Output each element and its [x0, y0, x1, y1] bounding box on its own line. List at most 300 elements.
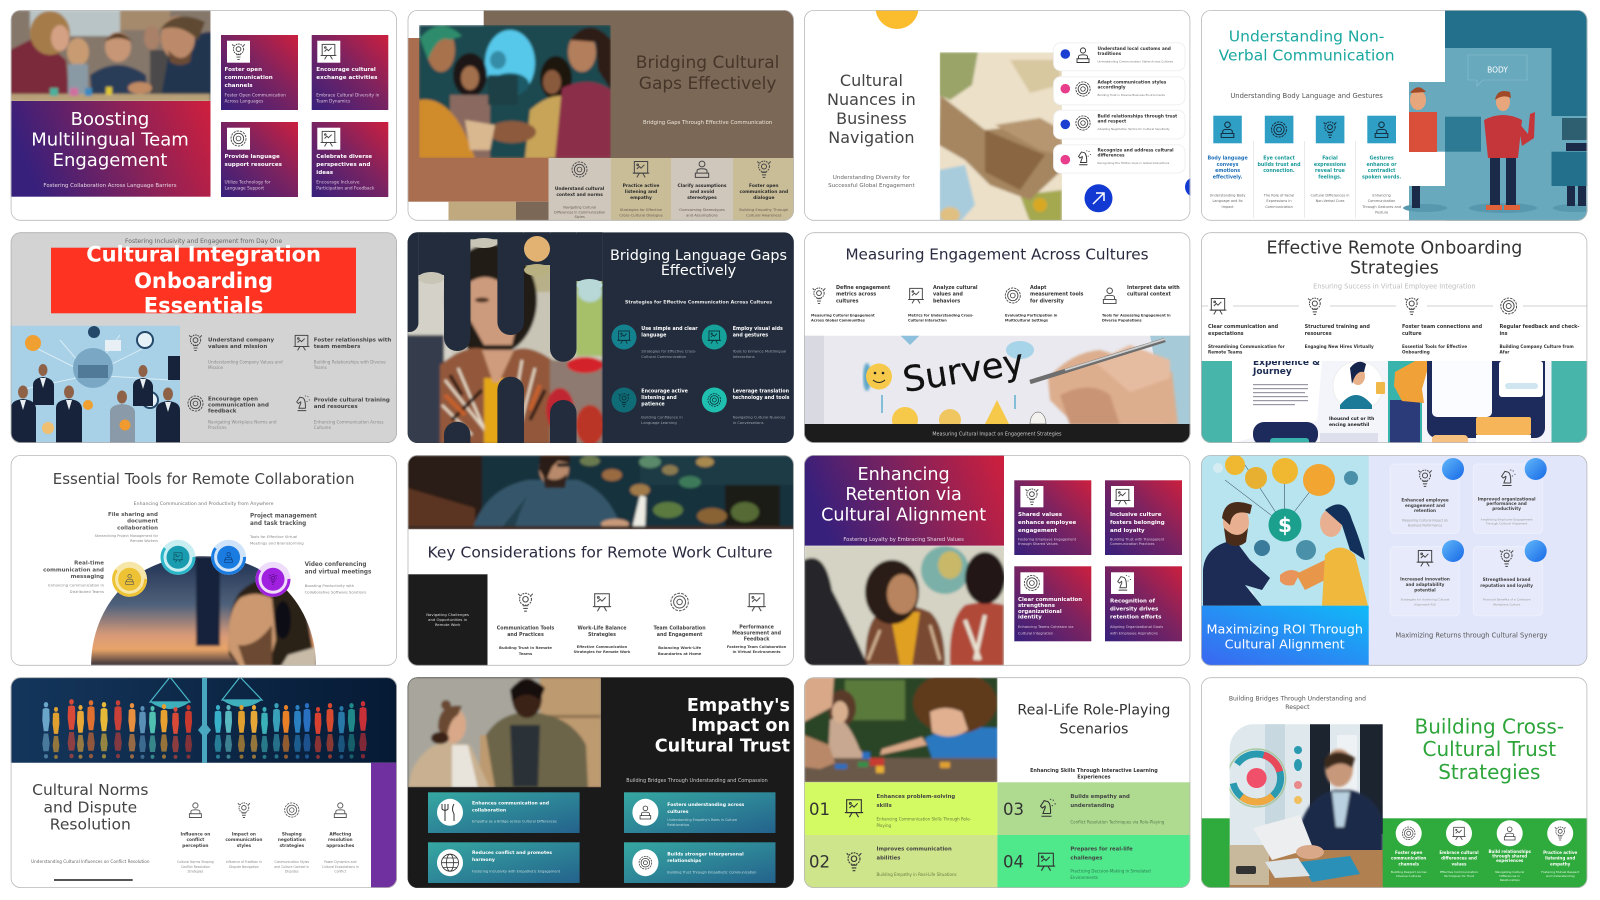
tile: Inclusive culture: and loyalty	[1110, 528, 1145, 534]
column: Body language: Language and Its	[1212, 199, 1243, 203]
title: Effective Remote Onboarding	[1266, 238, 1522, 258]
item: Use simple and clear language	[612, 324, 698, 359]
title: Resolution	[50, 816, 131, 834]
item: Use simple and clear language: Use simple and clear	[641, 326, 698, 332]
label: Project management: Tools for Effective Virtual	[249, 534, 297, 539]
column: Build relationships: through shared	[1492, 854, 1527, 858]
column: Work-Life Balance	[574, 594, 631, 654]
item: Define engagement metrics: Measuring Cultural Engagement	[811, 314, 875, 318]
panel: Empathy's Impact on Cultural Trust slide	[407, 677, 794, 888]
item: Analyze cultural values: Analyze cultural	[933, 285, 978, 291]
tile: Foster open communication channels	[221, 35, 298, 110]
column: Eye contact: Eye contact	[1263, 156, 1295, 162]
step: Clear communication: expectations	[1208, 331, 1244, 337]
tile: Provide language support resources: support resources	[224, 162, 283, 168]
row: Understand local customs and traditions	[1054, 43, 1185, 71]
tile: Recognition of diversity: with Employee Aspirations	[1110, 631, 1158, 635]
label: Real-time communication: Real-time	[74, 561, 104, 567]
tile: Encourage cultural exchange activities: Team Dynamics	[315, 98, 351, 104]
icon: blue arrow button	[1084, 184, 1112, 212]
item: Encourage open communication and feedback: Practices	[208, 425, 226, 430]
column: Gestures: enhance or	[1367, 162, 1397, 168]
item: Encourage active listening and patience: Language Learning	[641, 421, 677, 425]
cell 01	[804, 782, 997, 835]
column: Gestures: spoken words.	[1362, 174, 1401, 180]
tile: Reduces conflict: Fostering Inclusivity with Empathetic Engagement	[472, 869, 561, 873]
item: Employ visual aids and gestures: Interactions	[733, 355, 755, 359]
column: Team Collaboration: Balancing Work-Life	[658, 645, 701, 650]
column: Shaping negotiation strategies: negotiation	[278, 837, 306, 843]
column: Foster open communication channels: Foster open	[1395, 850, 1423, 855]
item: Define engagement metrics: Across Global Communities	[811, 319, 865, 323]
title: Bridging Language Gaps	[610, 248, 787, 264]
tile: Inclusive culture	[1105, 480, 1182, 555]
column: Clarify assumptions and avoid stereotypes: and Assumptions	[686, 214, 718, 218]
title: Cultural	[840, 71, 903, 90]
subtitle: Enhancing Communication and Productivity from Anywhere	[134, 501, 274, 507]
column: Practice active listening: empathy	[1550, 862, 1571, 866]
title block: Maximizing ROI Through	[1206, 622, 1363, 637]
title banner: Onboarding	[134, 269, 273, 293]
column: Affecting resolution approaches: Conflict	[334, 870, 347, 874]
photo: woman talking to colleagues	[804, 546, 1004, 666]
subtitle: Strategies for Effective Communication Across Cultures	[625, 300, 772, 306]
column: Build relationships: Navigating Cultural	[1495, 870, 1524, 874]
cell 01: Enhances problem-solving	[876, 794, 955, 800]
tile: Builds stronger relationships: relationships	[667, 858, 701, 864]
card: Enhanced employee engagement: Enhanced employee	[1401, 498, 1449, 502]
column: Eye contact: Communication	[1265, 205, 1293, 209]
item: Interpret data	[1102, 285, 1180, 323]
item: Encourage active listening and patience: patience	[641, 401, 665, 407]
column: Gestures: Gestures	[1369, 156, 1394, 162]
tile: Foster open communication channels: channels	[224, 83, 253, 89]
illustration: experience and journey page: encing anewthil	[1329, 422, 1370, 428]
item: Interpret data: Interpret data with	[1127, 285, 1180, 291]
item: Encourage open communication and feedback	[188, 396, 277, 430]
item: Define engagement metrics: Define engagement	[836, 285, 891, 291]
tile: Celebrate diverse perspectives and ideas: Participation and Feedback	[316, 186, 375, 192]
step: Regular feedback: Regular feedback and check-	[1500, 324, 1579, 330]
tile: Fosters understanding: Fosters understanding across	[667, 802, 745, 808]
column: Gestures: Enhancing	[1372, 194, 1391, 198]
tile: Provide language support resources: Language Support	[224, 186, 264, 192]
column: Practice active listening: Fostering Mutual Respect	[1541, 870, 1580, 874]
column: Communication Tools	[497, 593, 554, 656]
cell 04: 04	[1003, 852, 1024, 871]
label: Real-time communication: communication and	[43, 567, 104, 573]
item: Provide cultural training and resources: Provide cultural training	[314, 397, 390, 403]
step: Clear communication: Clear communication and	[1208, 324, 1279, 330]
column: Body language: conveys	[1217, 163, 1239, 168]
label: Video conferencing: Collaborative Software Solutions	[305, 589, 366, 594]
column: Foster open communication channels: channels	[1398, 862, 1420, 866]
column: Embrace cultural differences: Embrace cultural	[1439, 850, 1479, 855]
tile: Encourage cultural exchange activities: Embrace Cultural Diversity in	[316, 92, 380, 98]
column: Impact on communication styles: Impact on	[232, 831, 256, 837]
title block: Cultural Alignment	[1225, 637, 1345, 652]
subtitle: Experiences	[1077, 774, 1111, 780]
column: Gestures: Communication	[1368, 199, 1395, 203]
item: Encourage active listening and patience	[612, 388, 689, 425]
column: Build relationships: Build relationships	[1489, 849, 1532, 854]
tile: Fosters understanding	[624, 792, 776, 833]
column: Shaping negotiation strategies	[274, 803, 310, 874]
column: Influence on conflict perception	[177, 803, 214, 874]
cell 03	[997, 782, 1190, 835]
panel: Key Considerations for Remote Work Culture slide	[407, 449, 795, 666]
column: Performance Measurement: in Virtual Environments	[733, 650, 781, 654]
column: Practice active listening and empathy	[611, 158, 671, 221]
step: Foster team connections	[1402, 298, 1483, 354]
column: Facial expressions: expressions	[1314, 162, 1346, 168]
column: Body language: effectively.	[1213, 174, 1243, 180]
row: Adapt communication styles accordingly: Building Trust in Diverse Business Environments	[1098, 93, 1165, 97]
panel: Cultural Nuances in Business Navigation slide	[804, 0, 1205, 223]
footer bar: Measuring Cultural Impact on Engagement Strategies	[932, 432, 1062, 438]
title: Key Considerations for Remote Work Culture	[427, 543, 773, 561]
card: Improved organizational performance: Through Cultural Alignment	[1485, 522, 1528, 526]
column: Build relationships: experiences	[1496, 858, 1524, 863]
label: Real-time communication: Distributed Teams	[70, 589, 104, 594]
step: Foster team connections: Foster team connections and	[1402, 324, 1483, 330]
cell 04	[997, 835, 1190, 889]
label: File sharing: document	[127, 519, 158, 525]
photo: handshake over a map	[940, 52, 1062, 221]
card: Strengthened brand: Strengthened brand	[1483, 577, 1531, 582]
column: Foster open communication and dialogue: communication and	[739, 189, 788, 195]
item: Foster relationships with team members: team members	[314, 344, 361, 350]
tile: Shared values: through Shared Values	[1018, 542, 1058, 546]
column: Embrace cultural differences: values	[1452, 862, 1467, 866]
item: Use simple and clear language: Strategies for Effective Cross-	[641, 349, 697, 353]
tile: Clear communication: organizational	[1018, 609, 1062, 615]
tile: Shared values: Fostering Employee Engagement	[1018, 537, 1077, 541]
tile: Clear communication	[1014, 566, 1091, 641]
item: Define engagement metrics: cultures	[836, 298, 859, 304]
item: Define engagement metrics: metrics across	[836, 292, 876, 298]
card: Enhanced employee engagement: Measuring Cultural Impact on	[1402, 518, 1448, 522]
illustration: experience and journey page: Ihousnd cut or Ith	[1329, 416, 1374, 422]
item: Foster relationships with team members: Building Relationships with Diverse	[314, 360, 386, 364]
column: Body language: Understanding Body	[1210, 194, 1245, 198]
tile: Fosters understanding: Understanding Empathy's Roles in Culture	[667, 818, 737, 822]
tile: Recognition of diversity: Aligning Organizational Goals	[1110, 625, 1163, 629]
tile: Clear communication: identity	[1018, 614, 1042, 620]
step: Foster team connections: Essential Tools for Effective	[1402, 344, 1467, 349]
panel: Measuring Engagement Across Cultures slide	[804, 232, 1191, 443]
step: Structured training: Structured training and	[1305, 324, 1370, 330]
item: Provide cultural training and resources: Cultures	[314, 425, 331, 430]
column: Communication Tools: Teams	[519, 651, 533, 656]
title: Measuring Engagement Across Cultures	[845, 245, 1149, 263]
label: Project management: Project management	[250, 514, 317, 520]
subtitle: Enhancing Skills Through Interactive Learning	[1030, 768, 1158, 774]
step: Structured training: Engaging New Hires Virtually	[1305, 344, 1374, 349]
tile: Encourage cultural exchange activities: Encourage cultural	[316, 67, 376, 73]
cell 02	[804, 835, 997, 889]
illustration: handshake with dollar network	[1201, 455, 1369, 606]
photo: two people comforting	[408, 678, 601, 788]
column: Influence on conflict perception: Strategies	[187, 870, 204, 874]
label: Video conferencing: Boosting Productivity with	[305, 583, 355, 588]
title: Cultural Norms	[32, 781, 148, 799]
black callout block	[408, 574, 488, 666]
title block: Fostering Collaboration Across Language Barriers	[43, 183, 177, 189]
column: Understand cultural context and norms: Differences in Communication	[554, 210, 605, 214]
column: Body language	[1207, 116, 1248, 209]
column: Eye contact	[1257, 116, 1301, 209]
item: Encourage active listening and patience: listening and	[641, 395, 677, 401]
column: Impact on communication styles: communication	[225, 837, 262, 843]
title banner: Essentials	[144, 294, 263, 318]
photo: hand writing Survey	[804, 336, 1190, 424]
item: Analyze cultural values: Cultural Interaction	[908, 319, 947, 323]
tile: Inclusive culture: Inclusive culture	[1110, 512, 1162, 518]
illustration: experience and journey page: Journey	[1252, 367, 1292, 377]
tile: Recognition of diversity: diversity drives	[1110, 607, 1159, 613]
icon: yellow half circle	[876, 10, 918, 29]
item: Analyze cultural values: values and	[933, 292, 963, 298]
column: Performance Measurement: Measurement and	[732, 631, 782, 637]
item: Use simple and clear language: Cultural Communication	[641, 355, 687, 359]
card: Increased innovation: Increased innovation	[1400, 576, 1450, 582]
title: Impact on	[691, 716, 790, 736]
item: Adapt measurement tools: measurement tools	[1030, 292, 1084, 298]
item: Encourage active listening and patience: Encourage active	[641, 389, 689, 395]
tile: Clear communication: Enhancing Teams Cohesion via	[1018, 625, 1074, 629]
item: Understand company values and mission: Understanding Company Values and	[208, 360, 283, 364]
column: Impact on communication styles: Influence of Tradition in	[226, 860, 262, 864]
column: Facial expressions: reveal true	[1315, 168, 1346, 174]
panel: Bridging Language Gaps Effectively slide	[400, 222, 794, 462]
column: Team Collaboration: and Engagement	[657, 632, 703, 638]
panel: Understanding Non-Verbal Communication slide	[1201, 10, 1597, 221]
column: Work-Life Balance: Work-Life Balance	[578, 626, 627, 632]
card: Improved organizational performance: Amplifying Employee Engagement	[1481, 518, 1533, 522]
subtitle: Understanding Diversity for	[833, 175, 911, 181]
panel: Cultural Integration Onboarding Essentials slide	[10, 232, 397, 444]
tile: Recognition of diversity: retention efforts	[1110, 614, 1162, 620]
column: Facial expressions	[1310, 116, 1350, 203]
column: Communication Tools: Communication Tools	[497, 626, 554, 632]
card: Enhanced employee engagement: retention	[1414, 508, 1436, 513]
tile: Celebrate diverse perspectives and ideas: perspectives and	[316, 162, 370, 168]
column: Shaping negotiation strategies: strategies	[279, 843, 305, 849]
row: Adapt communication styles accordingly: Adapt communication styles	[1098, 80, 1167, 86]
title: Verbal Communication	[1219, 46, 1395, 64]
subtitle: Ensuring Success in Virtual Employee Integration	[1313, 283, 1476, 291]
column: Clarify assumptions and avoid stereotypes: Overcoming Stereotypes	[679, 208, 725, 212]
card: Enhanced employee engagement	[1390, 458, 1464, 533]
title block	[11, 101, 211, 197]
card: Improved organizational performance: Improved organizational	[1478, 496, 1536, 502]
title block: Retention via	[845, 485, 962, 505]
column: Work-Life Balance: Effective Communication	[577, 645, 628, 649]
title: Cultural Trust	[1423, 737, 1556, 761]
tile: Provide language support resources	[221, 122, 298, 197]
row: Build relationships through trust and respect: Build relationships through trust	[1098, 114, 1177, 120]
item: Understand company values and mission: values and mission	[208, 344, 267, 350]
item: Use simple and clear language: language	[641, 332, 667, 338]
step: Foster team connections: Onboarding	[1402, 350, 1430, 354]
item: Leverage translation technology and tools: Leverage translation	[733, 389, 790, 395]
tile: Reduces conflict: Reduces conflict and promotes	[472, 850, 552, 856]
footer bar	[804, 424, 1191, 443]
title: Real-Life Role-Playing	[1017, 702, 1170, 718]
title: Gaps Effectively	[639, 74, 776, 94]
column: Body language: Body language	[1207, 156, 1248, 162]
subtitle: Building Bridges Through Understanding and	[1229, 695, 1366, 702]
tile: Celebrate diverse perspectives and ideas: Celebrate diverse	[316, 154, 372, 160]
column: Facial expressions: feelings.	[1318, 174, 1342, 180]
column: Affecting resolution approaches: Power Dynamics and	[324, 860, 357, 864]
item: Define engagement metrics	[811, 285, 891, 323]
row: Recognize and address cultural differences	[1054, 145, 1185, 173]
column: Body language: emotions	[1215, 168, 1240, 174]
column: Influence on conflict perception: Influence on	[180, 831, 210, 837]
title block	[1201, 606, 1369, 666]
tile: Enhances communication: Empathy as a Bridge across Cultural Differences	[472, 820, 557, 824]
card: Increased innovation	[1390, 540, 1464, 616]
step: Regular feedback: Building Company Culture from	[1500, 344, 1574, 349]
column: Communication Tools: and Practices	[507, 632, 544, 638]
title: Cultural Trust	[655, 737, 790, 757]
column: Eye contact: Expressions in	[1266, 199, 1292, 203]
column: Foster open communication and dialogue	[733, 158, 794, 221]
tile: Shared values	[1014, 480, 1091, 555]
column: Foster open communication channels: Building Rapport Across	[1391, 870, 1427, 874]
subtitle: Bridging Gaps Through Effective Communication	[643, 120, 772, 126]
title block	[804, 455, 1004, 546]
cell 03: Builds empathy and	[1070, 794, 1130, 800]
panel: Effective Remote Onboarding Strategies slide	[1201, 232, 1588, 446]
item: Understand company values and mission: Understand company	[208, 337, 274, 343]
column: Understand cultural context and norms: Styles	[574, 215, 585, 219]
node: real-time communication	[112, 562, 147, 597]
column: Understand cultural context and norms: context and norms	[556, 192, 603, 198]
card: Increased innovation: and adaptability	[1406, 582, 1445, 587]
column: Performance Measurement	[727, 594, 787, 654]
column: Practice active listening and empathy: empathy	[630, 195, 652, 201]
title: Essential Tools for Remote Collaboration	[53, 470, 354, 488]
row: Build relationships through trust and respect	[1054, 110, 1185, 139]
subtitle: Understanding Body Language and Gestures	[1230, 92, 1383, 100]
illustration: presenter with speech bubble: BODY	[1487, 66, 1508, 74]
tile: Fosters understanding: cultures	[667, 809, 689, 815]
card: Improved organizational performance: performance and	[1486, 501, 1527, 506]
item: Adapt measurement tools: Adapt	[1030, 285, 1047, 291]
card: Strengthened brand: Financial Benefits of a Cohesive	[1483, 598, 1531, 602]
item: Employ visual aids and gestures: Employ visual aids	[733, 326, 783, 332]
item: Employ visual aids and gestures: and gestures	[733, 332, 768, 338]
row: Build relationships through trust and respect: Adapting Negotiation Tactics for Cultural Sensitivity	[1098, 127, 1170, 131]
tile: Inclusive culture: Building Trust with Transparent	[1110, 537, 1165, 541]
title banner: Cultural Integration	[86, 243, 321, 267]
subtitle: Fostering Inclusivity and Engagement from Day One	[125, 238, 282, 245]
item: Adapt measurement tools: for diversity	[1030, 298, 1065, 304]
title: Building Cross-	[1415, 714, 1564, 738]
column: Eye contact: builds trust and	[1257, 162, 1301, 168]
tile: Foster open communication channels: Foster open	[224, 67, 262, 73]
photo: children playing with blocks	[804, 677, 998, 782]
tile: Shared values: enhance employee	[1018, 520, 1076, 526]
title banner	[51, 243, 356, 318]
step: Regular feedback: ins	[1500, 331, 1508, 337]
cell 01: skills	[876, 803, 892, 809]
tile: Inclusive culture: fosters belonging	[1110, 520, 1165, 526]
row: Understand local customs and traditions: traditions	[1098, 51, 1122, 57]
tile: Celebrate diverse perspectives and ideas: ideas	[316, 170, 334, 176]
column: Shaping negotiation strategies: Disputes	[285, 870, 299, 874]
item: Leverage translation technology and tools: Navigating Cultural Nuances	[733, 416, 786, 420]
item: Provide cultural training and resources: Enhancing Communication Across	[314, 420, 383, 424]
column: Practice active listening: Practice active	[1543, 850, 1578, 855]
illustration: experience and journey page: Experience &	[1253, 358, 1320, 368]
photo: woman seen through rounded slots	[400, 222, 604, 462]
column: Influence on conflict perception: perception	[182, 843, 208, 849]
row: Recognize and address cultural differences: Recognizing the Hidden Cues in Global Interactions	[1098, 161, 1170, 165]
item: Encourage open communication and feedback: feedback	[208, 408, 237, 414]
cell 03: understanding	[1070, 803, 1114, 809]
step: Clear communication: Streamlining Communication for	[1208, 344, 1286, 349]
title: Effectively	[661, 263, 737, 279]
photo: man on a laptop with floating islands	[408, 455, 794, 530]
column: Clarify assumptions and avoid stereotypes: and avoid	[690, 189, 714, 195]
title block: Engagement	[53, 150, 167, 171]
cell 02: Improves communication	[876, 846, 952, 852]
step: Regular feedback	[1500, 298, 1579, 354]
photo: business people network	[10, 326, 180, 443]
item: Leverage translation technology and tools: technology and tools	[733, 395, 790, 401]
item: Foster relationships with team members	[294, 335, 391, 370]
item: Encourage active listening and patience: Building Confidence in	[641, 416, 683, 420]
card: Strengthened brand: Workplace Culture	[1493, 602, 1521, 606]
tile: Recognition of diversity: Recognition of	[1110, 599, 1156, 605]
panel: Boosting Multilingual Team Engagement slide	[10, 10, 397, 221]
column: Shaping negotiation strategies: Shaping	[282, 831, 302, 837]
card: Improved organizational performance	[1474, 458, 1547, 533]
panel: Enhancing Retention via Cultural Alignment slide	[804, 455, 1190, 666]
column: Team Collaboration: Boundaries at Home	[658, 651, 702, 656]
column: Team Collaboration: Team Collaboration	[654, 626, 706, 632]
item: Foster relationships with team members: Foster relationships with	[314, 337, 391, 343]
item: Analyze cultural values: Metrics for Understanding Cross-	[908, 314, 974, 318]
title: Bridging Cultural	[636, 53, 779, 73]
column: Shaping negotiation strategies: and Culture Context in	[274, 865, 309, 869]
label: Video conferencing: and virtual meetings	[305, 570, 372, 576]
card: Increased innovation: Strategies for Achieving Cultural	[1401, 598, 1450, 602]
item: Interpret data: Diverse Populations	[1102, 319, 1142, 323]
subtitle: Respect	[1285, 704, 1310, 711]
column: Affecting resolution approaches: Cultural Expectations in	[322, 865, 359, 869]
item: Employ visual aids and gestures	[702, 324, 786, 359]
tile: Clear communication: strengthens	[1018, 603, 1055, 609]
row: Recognize and address cultural differences: differences	[1098, 152, 1125, 158]
column: Practice active listening and empathy: Practice active	[623, 183, 659, 189]
tile: Clear communication: Clear communication	[1018, 597, 1082, 603]
row: Recognize and address cultural differences: Recognize and address cultural	[1098, 148, 1174, 154]
column: Clarify assumptions and avoid stereotypes: Clarify assumptions	[677, 183, 727, 189]
panel: Maximizing ROI Through Cultural Alignment slide	[1201, 455, 1587, 666]
cell 04: Practicing Decision-Making in Simulated	[1070, 868, 1151, 874]
column: Embrace cultural differences: Techniques for Trust	[1443, 874, 1475, 878]
card: Strengthened brand	[1474, 540, 1547, 616]
tile: Celebrate diverse perspectives and ideas	[312, 122, 388, 197]
step: Regular feedback: Afar	[1500, 350, 1510, 354]
cell 01: Playing	[876, 823, 891, 828]
column: Work-Life Balance: Strategies	[588, 632, 616, 638]
